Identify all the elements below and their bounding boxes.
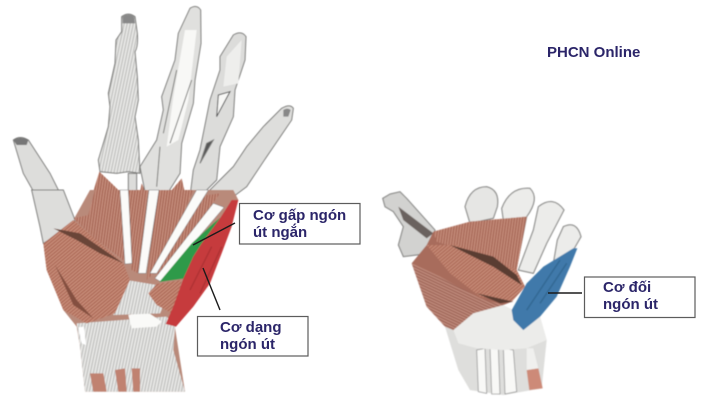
palm and wrist — [32, 190, 238, 392]
wrist tendons — [77, 317, 185, 392]
muscle near abductor — [148, 280, 182, 315]
palm muscles — [128, 190, 148, 273]
leader line: flexor — [193, 223, 235, 245]
fingers — [13, 7, 293, 200]
callout: Cơ đối ngón út: ngón út — [603, 296, 658, 313]
leader line: opponens — [548, 292, 582, 294]
callout: Cơ đối ngón út: Cơ đối — [603, 279, 651, 296]
callout: Cơ dạng ngón út — [198, 316, 308, 356]
callout: Cơ dạng ngón út: ngón út — [220, 336, 275, 353]
callout: Cơ gấp ngón út ngắn: Cơ gấp ngón — [253, 207, 346, 224]
callout: Cơ gấp ngón út ngắn — [240, 204, 360, 244]
green: flexor digiti minimi brevis — [159, 217, 221, 282]
first interosseous muscle — [73, 190, 125, 262]
muscle silhouette — [412, 217, 527, 330]
callout: Cơ gấp ngón út ngắn: út ngắn — [253, 223, 307, 241]
callout: Cơ đối ngón út — [584, 277, 695, 318]
red: abductor digiti minimi — [166, 200, 238, 327]
muscle bases between fingers — [91, 172, 233, 200]
white fascia — [453, 305, 547, 350]
blue: opponens digiti minimi — [512, 248, 577, 330]
callout: Cơ dạng ngón út: Cơ dạng — [220, 319, 282, 336]
index finger — [98, 14, 140, 173]
middle finger — [140, 7, 201, 200]
thumb tip — [13, 137, 63, 200]
opponens muscle — [427, 245, 525, 302]
wrist base — [445, 310, 547, 395]
thumb base — [32, 190, 75, 243]
finger bones — [465, 187, 498, 223]
carpal ligament — [113, 280, 173, 315]
ring finger — [190, 33, 246, 200]
left hand illustration — [13, 7, 581, 395]
leader line: abductor — [203, 268, 220, 310]
palm silhouette — [43, 190, 238, 392]
right hand illustration — [383, 187, 581, 395]
thumb bone — [383, 192, 435, 257]
title: PHCN Online: PHCN Online — [547, 44, 640, 61]
white tendons — [120, 190, 224, 282]
thenar muscles — [43, 220, 130, 323]
lower thenar muscle — [412, 263, 503, 330]
adductor muscle — [433, 217, 527, 270]
little finger — [200, 106, 293, 200]
